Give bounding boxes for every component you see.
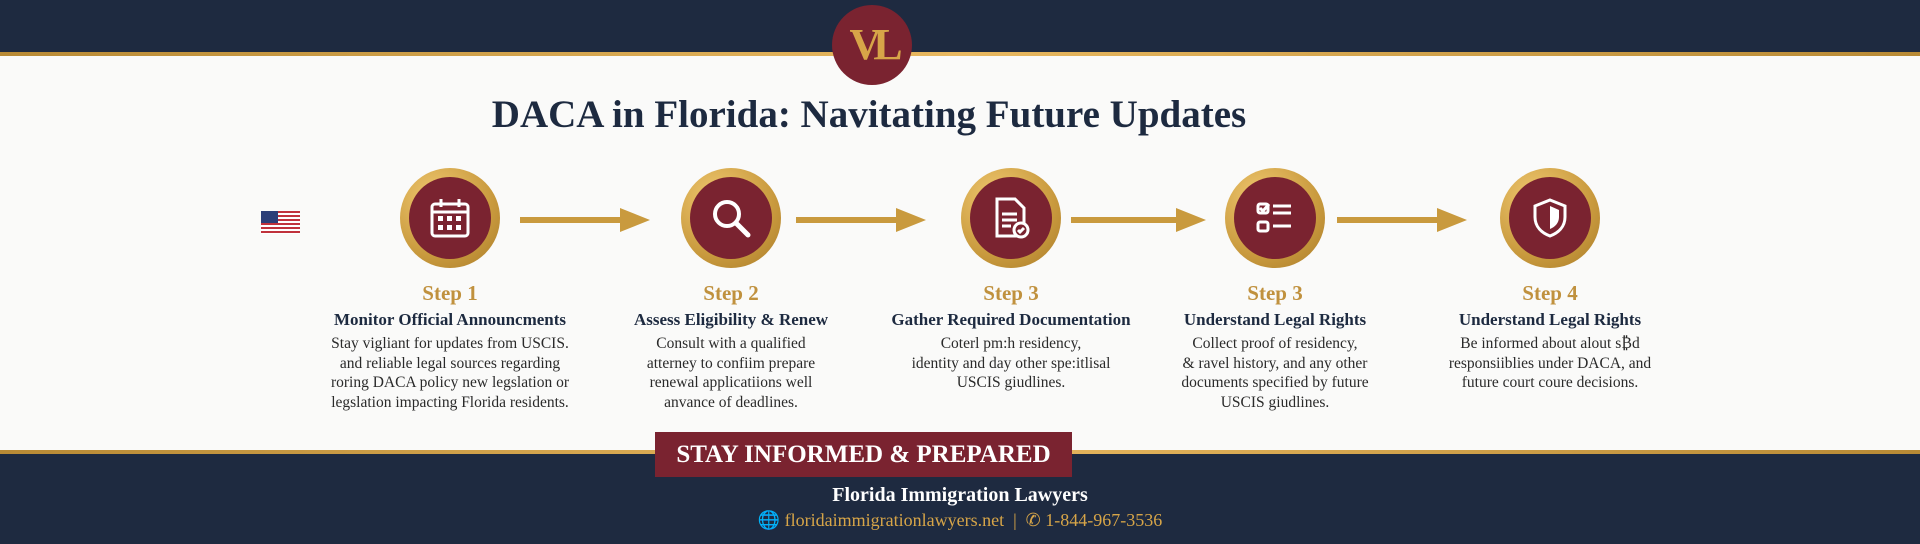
step 1 text: Step 1 — [422, 281, 478, 305]
step 1 circle — [400, 168, 500, 268]
logo — [832, 5, 912, 85]
step 3 text: Coterl pm:h residency, — [941, 335, 1081, 352]
contact line: 🌐 floridaimmigrationlawyers.net | ✆ 1-844-967-3536 — [758, 510, 1162, 530]
step 2 circle — [681, 168, 781, 268]
step 1 text — [331, 281, 569, 410]
step 2 text: atterney to confiim prepare — [647, 354, 815, 372]
step 2 text: Step 2 — [703, 281, 759, 305]
step 2 text — [634, 281, 828, 410]
step 2 text: Consult with a qualified — [656, 335, 806, 352]
step 3 text: Step 3 — [983, 281, 1039, 305]
step 4 text: Collect proof of residency, — [1192, 335, 1358, 352]
banner: stay informed: STAY INFORMED & PREPARED — [676, 441, 1051, 468]
step 4 text: USCIS giudlines. — [1221, 394, 1329, 410]
step 5 text: Step 4 — [1522, 281, 1578, 305]
step 4 text — [1181, 281, 1369, 410]
icon: US flag — [261, 211, 300, 234]
step 3 text: Gather Required Documentation — [891, 310, 1131, 329]
step 3 text: identity and day other spe:itlisal — [912, 354, 1110, 372]
step 3 text: USCIS giudlines. — [957, 374, 1065, 391]
step 1 text: roring DACA policy new legslation or — [331, 374, 569, 391]
firm name: Florida Immigration Lawyers — [832, 484, 1088, 506]
arrow 4 — [1337, 208, 1467, 232]
step 5 circle — [1500, 168, 1600, 268]
step 4 text: documents specified by future — [1181, 374, 1369, 391]
arrow 1 — [520, 208, 650, 232]
arrow 2 — [796, 208, 926, 232]
step 5 text: Understand Legal Rights — [1459, 310, 1641, 329]
step 2 text: renewal applicatiions well — [650, 374, 812, 391]
step 2 text: Assess Eligibility & Renew — [634, 310, 828, 329]
logo: VL — [849, 20, 895, 69]
step 4 text: Understand Legal Rights — [1184, 310, 1366, 329]
step 4 text: Step 3 — [1247, 281, 1303, 305]
step 1 text: Stay vigliant for updates from USCIS. — [331, 335, 569, 352]
step 3 text — [891, 281, 1131, 391]
step 3 circle — [961, 168, 1061, 268]
arrow 3 — [1071, 208, 1206, 232]
title: DACA in Florida: Navitating Future Updates — [492, 93, 1246, 136]
step 5 text: responsiiblies under DACA, and — [1449, 354, 1651, 372]
step 2 text: anvance of deadlines. — [664, 394, 798, 410]
banner: stay informed — [655, 432, 1072, 477]
step 1 text: legslation impacting Florida residents. — [331, 394, 569, 410]
step 5 text: future court coure decisions. — [1462, 374, 1638, 391]
step 1 text: Monitor Official Announcments — [334, 310, 566, 329]
step 5 text — [1449, 281, 1651, 391]
footer band — [0, 450, 1920, 454]
header band — [0, 0, 1920, 52]
step 4 text: & ravel history, and any other — [1183, 354, 1367, 372]
step 5 text: Be informed about alout s₿d — [1460, 335, 1640, 352]
step 1 text: and reliable legal sources regarding — [340, 354, 560, 372]
step 4 circle — [1225, 168, 1325, 268]
